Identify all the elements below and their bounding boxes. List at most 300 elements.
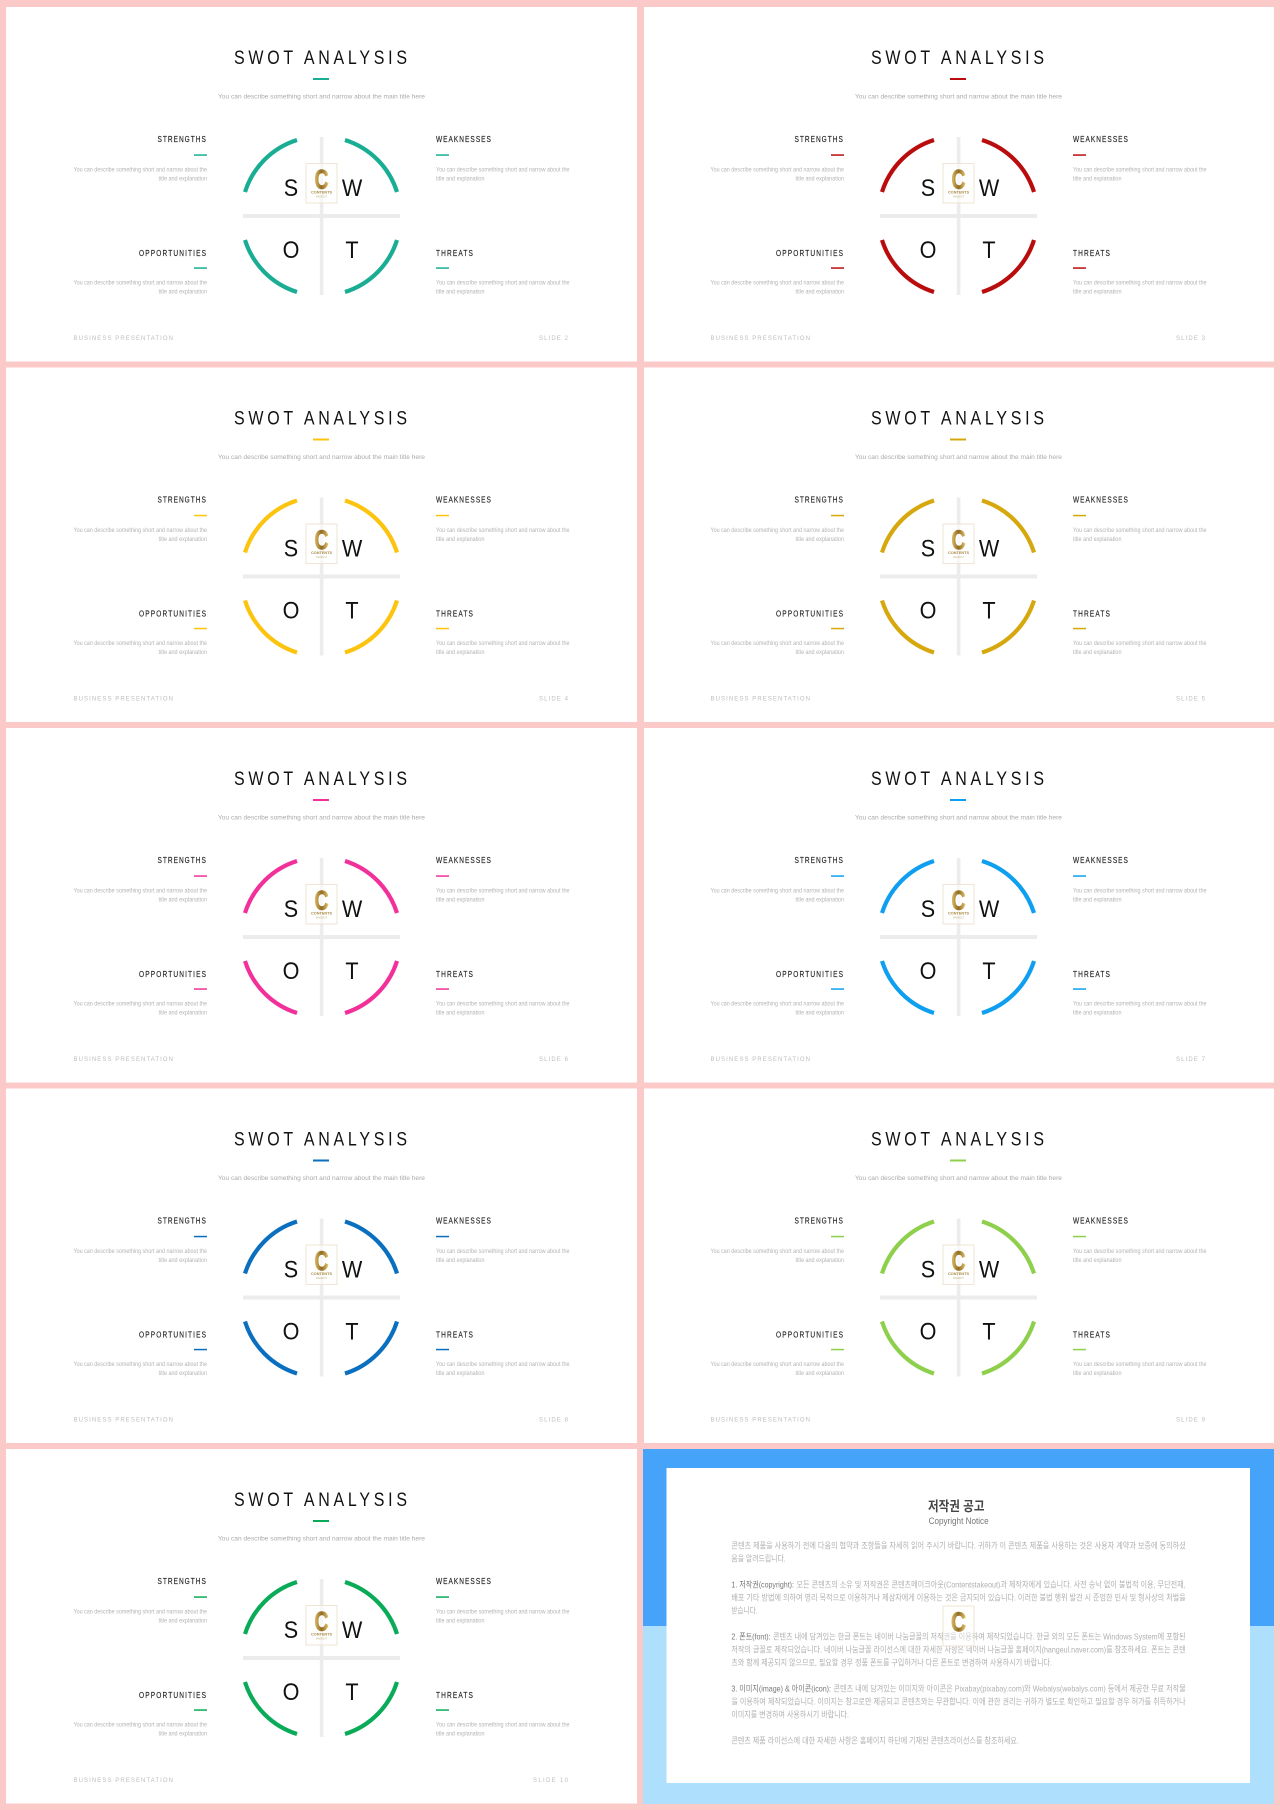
strengths block xyxy=(74,495,207,543)
SWOT diagram xyxy=(243,137,400,295)
strengths block: title and explanation xyxy=(158,175,207,182)
opportunities block: OPPORTUNITIES xyxy=(776,609,843,619)
footer xyxy=(710,696,1206,702)
SWOT diagram: S xyxy=(921,534,935,562)
threats block xyxy=(436,609,570,656)
opportunities block xyxy=(74,1330,207,1377)
opportunities block xyxy=(74,248,207,295)
logo: CONTENTS xyxy=(311,190,332,194)
panel: green SWOT slide 10 xyxy=(6,1449,637,1804)
logo xyxy=(306,1245,337,1284)
weaknesses block xyxy=(436,1216,570,1264)
weaknesses block: WEAKNESSES xyxy=(1073,134,1128,144)
strengths block: You can describe something short and narrow about the xyxy=(74,887,207,894)
clause 1 copyright: 1. 저작권(copyright): xyxy=(731,1579,794,1589)
threats block xyxy=(436,248,570,295)
SWOT diagram: S xyxy=(284,534,298,562)
panel: pink SWOT slide 6 xyxy=(6,728,637,1082)
footer xyxy=(710,1057,1206,1063)
logo: C xyxy=(952,886,966,916)
opportunities block xyxy=(710,969,844,1016)
clause 1 copyright: 모든 콘텐츠의 소유 및 저작권은 콘텐츠메이크아웃(Contentstakeout)과 제작자에게 있습니다. 사전 승낙 없이 불법적 이용, 무단전재, xyxy=(796,1579,1186,1589)
logo xyxy=(306,884,337,924)
SWOT diagram: W xyxy=(342,1616,363,1643)
intro paragraph: 음을 알려드립니다. xyxy=(731,1553,786,1563)
strengths block: STRENGTHS xyxy=(795,134,843,144)
threats block xyxy=(1073,969,1207,1016)
SWOT diagram: S xyxy=(284,174,298,201)
panel: red SWOT slide 3 xyxy=(644,7,1274,362)
weaknesses block: title and explanation xyxy=(1073,175,1122,182)
clause 2 font xyxy=(731,1631,1186,1668)
subtitle: You can describe something short and narrow about the main title here xyxy=(855,814,1062,822)
panel: teal SWOT slide 2 xyxy=(6,7,637,362)
SWOT diagram: O xyxy=(283,596,299,624)
logo: C xyxy=(314,525,328,555)
strengths block: title and explanation xyxy=(796,1257,844,1264)
SWOT diagram: O xyxy=(283,236,299,263)
opportunities block: You can describe something short and narrow about the xyxy=(710,1000,844,1007)
opportunities block: title and explanation xyxy=(796,1009,844,1016)
threats block: You can describe something short and narrow about the xyxy=(436,1000,570,1007)
footer: BUSINESS PRESENTATION xyxy=(710,1418,810,1424)
threats block: You can describe something short and narrow about the xyxy=(436,279,570,286)
footer: SLIDE 8 xyxy=(539,1418,569,1424)
strengths block: You can describe something short and narrow about the xyxy=(74,166,207,173)
panel: yellow SWOT slide 4 xyxy=(6,368,637,722)
subtitle: You can describe something short and narrow about the main title here xyxy=(855,94,1062,100)
threats block: You can describe something short and narrow about the xyxy=(1073,279,1207,286)
strengths block: STRENGTHS xyxy=(158,1216,206,1226)
logo watermark: C xyxy=(951,1607,966,1637)
threats block: title and explanation xyxy=(436,649,485,656)
footer xyxy=(74,1057,569,1063)
strengths block: You can describe something short and narrow about the xyxy=(74,527,207,534)
opportunities block: OPPORTUNITIES xyxy=(776,1330,843,1340)
weaknesses block: You can describe something short and narrow about the xyxy=(436,166,570,173)
weaknesses block xyxy=(436,855,570,903)
logo: C xyxy=(314,886,328,916)
copyright heading: 저작권 공고 xyxy=(928,1499,984,1514)
strengths block: title and explanation xyxy=(796,896,844,903)
SWOT diagram: W xyxy=(342,1255,363,1283)
panel: sky blue SWOT slide 7 xyxy=(644,728,1274,1082)
strengths block xyxy=(710,134,844,182)
panel: copyright notice xyxy=(643,1449,1274,1804)
opportunities block: OPPORTUNITIES xyxy=(776,248,843,258)
threats block: title and explanation xyxy=(1073,1009,1122,1016)
closing note: 콘텐츠 제품 라이선스에 대한 자세한 사항은 홈페이지 하단에 기재된 콘텐츠라이선스를 참조하세요. xyxy=(731,1735,1019,1745)
SWOT diagram: O xyxy=(920,596,936,624)
footer: BUSINESS PRESENTATION xyxy=(74,1418,173,1424)
footer xyxy=(74,1418,569,1424)
strengths block xyxy=(74,855,207,903)
opportunities block: title and explanation xyxy=(158,288,207,295)
SWOT diagram: O xyxy=(920,1317,936,1345)
clause 3 image and icon xyxy=(731,1683,1186,1719)
subtitle: You can describe something short and narrow about the main title here xyxy=(218,814,425,822)
title: SWOT ANALYSIS xyxy=(234,47,407,68)
threats block: title and explanation xyxy=(1073,1370,1122,1377)
clause 2 font: 콘텐츠 내에 담겨있는 한글 폰트는 네이버 나눔글꼴의 저작권을 이용하여 제작되었습니다. 한글 외의 모든 폰트는 Windows System에 포함된 xyxy=(773,1631,1186,1641)
footer: BUSINESS PRESENTATION xyxy=(74,1057,173,1063)
strengths block xyxy=(710,855,844,903)
weaknesses block: WEAKNESSES xyxy=(436,134,491,144)
threats block: THREATS xyxy=(436,1330,473,1340)
SWOT diagram: T xyxy=(345,596,359,624)
threats block: THREATS xyxy=(1073,609,1110,619)
threats block xyxy=(436,1330,570,1377)
weaknesses block: You can describe something short and narrow about the xyxy=(1073,1248,1207,1255)
footer: BUSINESS PRESENTATION xyxy=(74,1778,173,1784)
strengths block xyxy=(74,134,207,182)
weaknesses block xyxy=(1073,1216,1207,1264)
strengths block: You can describe something short and narrow about the xyxy=(710,887,844,894)
logo: MAKEOUT xyxy=(953,916,964,920)
threats block: You can describe something short and narrow about the xyxy=(1073,640,1207,647)
SWOT diagram xyxy=(243,1579,400,1737)
footer xyxy=(710,1418,1206,1424)
footer: BUSINESS PRESENTATION xyxy=(74,696,173,702)
threats block xyxy=(436,969,570,1016)
threats block: You can describe something short and narrow about the xyxy=(436,1721,570,1728)
weaknesses block: WEAKNESSES xyxy=(436,1576,491,1586)
weaknesses block: You can describe something short and narrow about the xyxy=(1073,527,1207,534)
opportunities block xyxy=(710,1330,844,1377)
strengths block xyxy=(710,495,844,543)
weaknesses block: title and explanation xyxy=(436,536,485,543)
weaknesses block xyxy=(436,1576,570,1624)
clause 3 image and icon: 이미지를 변경하여 사용하시기 바랍니다. xyxy=(731,1709,849,1719)
strengths block: STRENGTHS xyxy=(795,1216,843,1226)
logo watermark xyxy=(943,1606,974,1646)
SWOT diagram: T xyxy=(982,236,996,263)
footer xyxy=(74,1778,569,1784)
threats block: THREATS xyxy=(436,609,473,619)
SWOT diagram: O xyxy=(920,236,936,263)
SWOT diagram xyxy=(880,858,1037,1016)
weaknesses block: You can describe something short and narrow about the xyxy=(436,1248,570,1255)
opportunities block: You can describe something short and narrow about the xyxy=(74,640,207,647)
logo: MAKEOUT xyxy=(316,196,327,198)
logo: MAKEOUT xyxy=(953,196,964,198)
SWOT diagram: W xyxy=(342,534,363,562)
strengths block: You can describe something short and narrow about the xyxy=(710,527,844,534)
logo: CONTENTS xyxy=(311,1271,332,1276)
opportunities block: You can describe something short and narrow about the xyxy=(74,1000,207,1007)
clause 2 font: 츠와 함께 제공되지 않으므로, 필요할 경우 정품 폰트를 구입하거나 다른 폰트로 변경하여 사용하시기 바랍니다. xyxy=(731,1658,1052,1668)
footer: SLIDE 4 xyxy=(539,696,569,702)
threats block: You can describe something short and narrow about the xyxy=(1073,1000,1207,1007)
logo xyxy=(943,164,974,203)
title: SWOT ANALYSIS xyxy=(871,47,1044,68)
SWOT diagram: S xyxy=(284,1616,298,1643)
title: SWOT ANALYSIS xyxy=(234,407,407,429)
opportunities block: title and explanation xyxy=(796,1370,844,1377)
opportunities block xyxy=(710,248,844,295)
weaknesses block xyxy=(436,495,570,543)
SWOT diagram xyxy=(880,137,1037,295)
title: SWOT ANALYSIS xyxy=(234,768,407,789)
SWOT diagram: T xyxy=(345,957,359,984)
weaknesses block: WEAKNESSES xyxy=(1073,1216,1128,1226)
subtitle: You can describe something short and narrow about the main title here xyxy=(855,1175,1062,1182)
opportunities block: OPPORTUNITIES xyxy=(139,248,206,258)
weaknesses block xyxy=(1073,134,1207,182)
threats block: THREATS xyxy=(436,248,473,258)
strengths block: STRENGTHS xyxy=(158,855,206,865)
SWOT diagram xyxy=(243,858,400,1016)
logo: CONTENTS xyxy=(311,1632,332,1636)
opportunities block: title and explanation xyxy=(796,288,844,295)
SWOT diagram: O xyxy=(283,1678,299,1705)
logo xyxy=(943,1245,974,1284)
weaknesses block: You can describe something short and narrow about the xyxy=(1073,887,1207,894)
threats block: You can describe something short and narrow about the xyxy=(436,640,570,647)
opportunities block: title and explanation xyxy=(158,649,207,656)
weaknesses block: title and explanation xyxy=(436,1617,485,1624)
SWOT diagram: W xyxy=(979,1255,1000,1283)
SWOT diagram: W xyxy=(342,174,363,201)
logo: CONTENTS xyxy=(948,190,969,194)
weaknesses block: You can describe something short and narrow about the xyxy=(436,1608,570,1615)
strengths block: title and explanation xyxy=(158,1617,207,1624)
threats block: title and explanation xyxy=(436,1009,485,1016)
strengths block: STRENGTHS xyxy=(795,855,843,865)
strengths block xyxy=(74,1576,207,1624)
opportunities block: title and explanation xyxy=(158,1370,207,1377)
logo xyxy=(306,524,337,564)
panel: lime SWOT slide 9 xyxy=(644,1088,1274,1443)
opportunities block: OPPORTUNITIES xyxy=(139,609,206,619)
weaknesses block: WEAKNESSES xyxy=(1073,495,1128,505)
SWOT diagram: S xyxy=(284,895,298,922)
opportunities block: You can describe something short and narrow about the xyxy=(74,1361,207,1368)
SWOT diagram: O xyxy=(920,957,936,984)
weaknesses block xyxy=(1073,495,1207,543)
strengths block: STRENGTHS xyxy=(158,134,206,144)
strengths block: You can describe something short and narrow about the xyxy=(710,1248,844,1255)
threats block xyxy=(436,1690,570,1737)
strengths block: STRENGTHS xyxy=(158,1576,206,1586)
subtitle: You can describe something short and narrow about the main title here xyxy=(218,94,425,100)
logo: MAKEOUT xyxy=(953,556,964,559)
opportunities block: You can describe something short and narrow about the xyxy=(74,279,207,286)
footer: BUSINESS PRESENTATION xyxy=(710,336,810,342)
weaknesses block xyxy=(1073,855,1207,903)
SWOT diagram xyxy=(880,498,1037,656)
logo: C xyxy=(314,164,328,194)
SWOT diagram: T xyxy=(345,236,359,263)
title: SWOT ANALYSIS xyxy=(871,768,1044,789)
logo: C xyxy=(952,164,966,194)
opportunities block xyxy=(74,609,207,656)
subtitle: You can describe something short and narrow about the main title here xyxy=(218,1175,425,1182)
threats block xyxy=(1073,609,1207,656)
logo: C xyxy=(952,1246,966,1276)
footer: SLIDE 2 xyxy=(539,336,569,342)
weaknesses block: You can describe something short and narrow about the xyxy=(436,887,570,894)
opportunities block: You can describe something short and narrow about the xyxy=(74,1721,207,1728)
SWOT diagram xyxy=(243,498,400,656)
weaknesses block: title and explanation xyxy=(436,896,485,903)
strengths block: title and explanation xyxy=(796,536,844,543)
subtitle: You can describe something short and narrow about the main title here xyxy=(218,1536,425,1542)
footer: SLIDE 10 xyxy=(533,1778,569,1784)
threats block: THREATS xyxy=(436,969,473,979)
opportunities block xyxy=(74,969,207,1016)
strengths block: title and explanation xyxy=(158,896,207,903)
intro paragraph xyxy=(731,1541,1186,1563)
clause 3 image and icon: 콘텐츠 내에 담겨있는 이미지와 아이콘은 Pixabay(pixabay.com)와 Webalys(webalys.com) 등에서 제공한 무료 저작물 xyxy=(834,1683,1186,1693)
subtitle: You can describe something short and narrow about the main title here xyxy=(218,454,425,461)
footer: BUSINESS PRESENTATION xyxy=(710,696,810,702)
weaknesses block: WEAKNESSES xyxy=(436,855,491,865)
copyright subheading: Copyright Notice xyxy=(929,1516,989,1526)
logo: MAKEOUT xyxy=(316,1638,327,1640)
threats block: title and explanation xyxy=(436,1370,485,1377)
weaknesses block: title and explanation xyxy=(1073,1257,1122,1264)
intro paragraph: 콘텐츠 제품을 사용하기 전에 다음의 협약과 조항들을 자세히 읽어 주시기 바랍니다. 귀하가 이 콘텐츠 제품을 사용하는 것은 사용자 계약과 보증에 동의하셨 xyxy=(731,1541,1186,1551)
SWOT diagram: W xyxy=(342,895,363,922)
strengths block: title and explanation xyxy=(158,1257,207,1264)
weaknesses block: title and explanation xyxy=(1073,896,1122,903)
SWOT diagram: T xyxy=(982,957,996,984)
SWOT diagram xyxy=(880,1218,1037,1376)
logo: MAKEOUT xyxy=(316,916,327,920)
opportunities block xyxy=(74,1690,207,1737)
SWOT diagram: S xyxy=(921,895,935,922)
SWOT diagram: T xyxy=(345,1678,359,1705)
strengths block: title and explanation xyxy=(796,175,844,182)
subtitle: You can describe something short and narrow about the main title here xyxy=(855,454,1062,461)
panel: gold SWOT slide 5 xyxy=(644,368,1274,722)
panel: dark blue SWOT slide 8 xyxy=(6,1088,637,1443)
SWOT diagram: T xyxy=(345,1317,359,1345)
SWOT diagram: O xyxy=(283,1317,299,1345)
strengths block: You can describe something short and narrow about the xyxy=(74,1608,207,1615)
footer: SLIDE 7 xyxy=(1176,1057,1206,1063)
threats block: You can describe something short and narrow about the xyxy=(436,1361,570,1368)
SWOT diagram xyxy=(243,1218,400,1376)
weaknesses block: title and explanation xyxy=(436,1257,485,1264)
footer: SLIDE 6 xyxy=(539,1057,569,1063)
strengths block: title and explanation xyxy=(158,536,207,543)
opportunities block: OPPORTUNITIES xyxy=(776,969,843,979)
clause 3 image and icon: 3. 이미지(image) & 아이콘(icon): xyxy=(731,1683,831,1693)
logo xyxy=(306,1606,337,1645)
weaknesses block: title and explanation xyxy=(436,175,485,182)
SWOT diagram: T xyxy=(982,1317,996,1345)
weaknesses block: You can describe something short and narrow about the xyxy=(1073,166,1207,173)
strengths block: STRENGTHS xyxy=(795,495,843,505)
clause 1 copyright: 받습니다. xyxy=(731,1606,758,1616)
clause 3 image and icon: 을 이용하여 제작되었습니다. 이미지는 참고로만 제공되고 콘텐츠와는 무관합니다. 이에 관한 권리는 귀하가 별도로 확인하고 필요할 경우 허가를 취득하거나 xyxy=(731,1696,1186,1706)
logo: CONTENTS xyxy=(311,910,332,916)
threats block xyxy=(1073,248,1207,295)
threats block xyxy=(1073,1330,1207,1377)
threats block: THREATS xyxy=(436,1690,473,1700)
logo: C xyxy=(314,1246,328,1276)
opportunities block: title and explanation xyxy=(158,1730,207,1737)
footer xyxy=(710,336,1206,342)
logo: C xyxy=(314,1606,328,1636)
logo: CONTENTS xyxy=(948,910,969,916)
weaknesses block: You can describe something short and narrow about the xyxy=(436,527,570,534)
logo: C xyxy=(952,525,966,555)
weaknesses block: WEAKNESSES xyxy=(1073,855,1128,865)
strengths block xyxy=(74,1216,207,1264)
threats block: You can describe something short and narrow about the xyxy=(1073,1361,1207,1368)
SWOT diagram: W xyxy=(979,174,1000,201)
footer xyxy=(74,696,569,702)
weaknesses block xyxy=(436,134,570,182)
clause 1 copyright xyxy=(731,1579,1186,1616)
weaknesses block: WEAKNESSES xyxy=(436,495,491,505)
footer: SLIDE 5 xyxy=(1176,696,1206,702)
logo xyxy=(306,164,337,203)
threats block: THREATS xyxy=(1073,1330,1110,1340)
strengths block xyxy=(710,1216,844,1264)
footer: BUSINESS PRESENTATION xyxy=(74,336,173,342)
threats block: THREATS xyxy=(1073,248,1110,258)
logo: CONTENTS xyxy=(948,550,969,555)
opportunities block: title and explanation xyxy=(158,1009,207,1016)
opportunities block: You can describe something short and narrow about the xyxy=(710,1361,844,1368)
SWOT diagram: W xyxy=(979,895,1000,922)
SWOT diagram: S xyxy=(284,1255,298,1283)
logo: MAKEOUT xyxy=(316,556,327,559)
logo: MAKEOUT xyxy=(953,1277,964,1280)
title: SWOT ANALYSIS xyxy=(871,1128,1044,1150)
opportunities block: OPPORTUNITIES xyxy=(139,1690,206,1700)
footer: BUSINESS PRESENTATION xyxy=(710,1057,810,1063)
strengths block: STRENGTHS xyxy=(158,495,206,505)
weaknesses block: WEAKNESSES xyxy=(436,1216,491,1226)
logo: CONTENTS xyxy=(948,1271,969,1276)
opportunities block xyxy=(710,609,844,656)
footer: SLIDE 3 xyxy=(1176,336,1206,342)
threats block: title and explanation xyxy=(436,1730,485,1737)
clause 1 copyright: 배포 기타 방법에 의하여 영리 목적으로 이용하거나 제삼자에게 이용하는 것은 금지되어 있습니다. 이러한 불법 행위 발견 시 준엄한 민사 및 형사상의 처벌을 xyxy=(731,1592,1186,1602)
threats block: THREATS xyxy=(1073,969,1110,979)
clause 2 font: 2. 폰트(font): xyxy=(731,1631,771,1641)
strengths block: You can describe something short and narrow about the xyxy=(710,166,844,173)
title: SWOT ANALYSIS xyxy=(871,407,1044,429)
threats block: title and explanation xyxy=(436,288,485,295)
opportunities block: OPPORTUNITIES xyxy=(139,1330,206,1340)
title: SWOT ANALYSIS xyxy=(234,1489,407,1510)
logo xyxy=(943,884,974,924)
SWOT diagram: O xyxy=(283,957,299,984)
clause 2 font: 저작의 글꼴로 제작되었습니다. 네이버 나눔글꼴 라이선스에 대한 자세한 사항은 네이버 나눔글꼴 홈페이지(hangeul.naver.com)를 참조하세요. 폰트는 콘텐 xyxy=(731,1644,1186,1654)
opportunities block: You can describe something short and narrow about the xyxy=(710,640,844,647)
footer xyxy=(74,336,569,342)
title: SWOT ANALYSIS xyxy=(234,1128,407,1150)
SWOT diagram: T xyxy=(982,596,996,624)
opportunities block: You can describe something short and narrow about the xyxy=(710,279,844,286)
opportunities block: title and explanation xyxy=(796,649,844,656)
SWOT diagram: W xyxy=(979,534,1000,562)
footer: SLIDE 9 xyxy=(1176,1418,1206,1424)
SWOT diagram: S xyxy=(921,174,935,201)
weaknesses block: title and explanation xyxy=(1073,536,1122,543)
logo: CONTENTS xyxy=(311,550,332,555)
logo xyxy=(943,524,974,564)
SWOT diagram: S xyxy=(921,1255,935,1283)
strengths block: You can describe something short and narrow about the xyxy=(74,1248,207,1255)
opportunities block: OPPORTUNITIES xyxy=(139,969,206,979)
